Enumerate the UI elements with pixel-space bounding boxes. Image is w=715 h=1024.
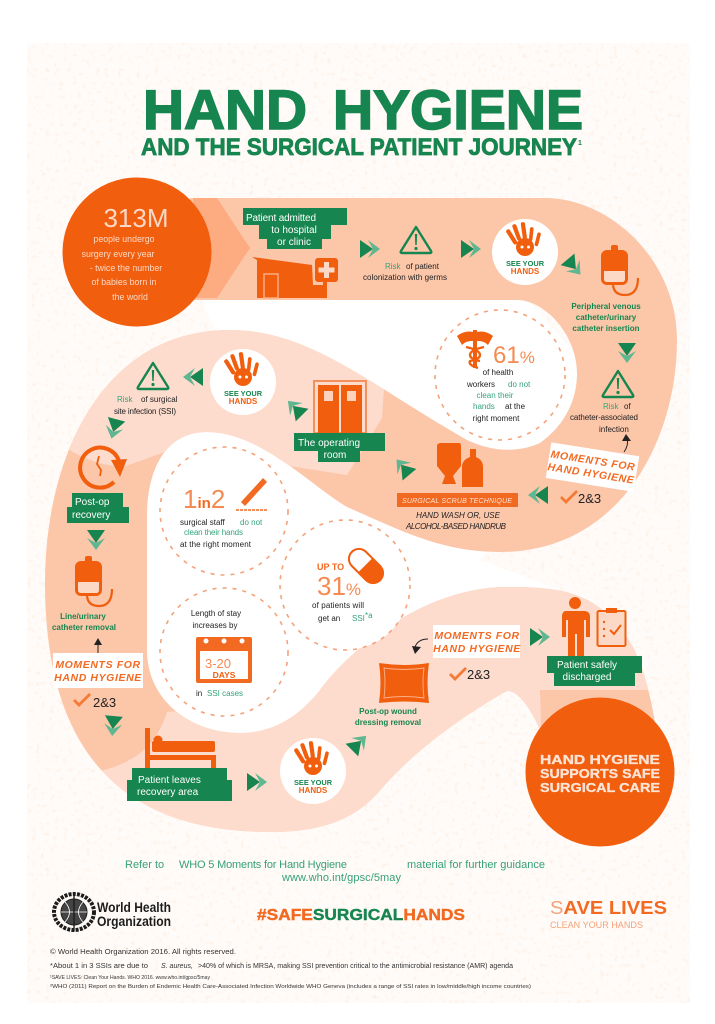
icon: pill — [343, 543, 389, 589]
text: refer to 5 moments: www.who.int/gpsc/5may — [281, 872, 402, 884]
label: patient admitted: to hospital — [271, 225, 317, 236]
arrow — [103, 715, 123, 737]
arrow: black curved pointer — [412, 639, 428, 654]
icon: see your hands 3: SEE YOUR — [294, 778, 333, 787]
icon: see your hands 1: HANDS — [511, 267, 540, 276]
wordmark: World Health — [97, 900, 171, 915]
check: moments 2 and 3: 2&3 — [467, 667, 490, 682]
callout: moments for hand hygiene 2: HAND HYGIENE — [54, 672, 142, 684]
text: risk of catheter infection — [570, 402, 638, 434]
check: moments 2 and 3: 2&3 — [93, 695, 116, 710]
label: patient leaves recovery area: recovery area — [137, 787, 199, 798]
chevron behind 313M circle — [193, 198, 250, 298]
text: risk of catheter infection: catheter-associated — [570, 413, 638, 422]
arrow: black curved pointer — [622, 434, 631, 452]
panel: 31 percent — [280, 520, 410, 650]
text: risk of colonization: colonization with germs — [363, 273, 447, 282]
statistic 1 in 2: 1in2 — [183, 484, 225, 514]
text: refer to 5 moments: WHO 5 Moments for Hand Hygiene — [179, 859, 347, 871]
icon: see your hands 1 — [492, 219, 558, 285]
text: in SSI cases: SSI cases — [207, 689, 243, 698]
text: risk of SSI: of surgical — [141, 395, 178, 404]
text: risk of SSI — [114, 395, 178, 416]
text: health workers: right moment — [473, 414, 520, 423]
text: risk of catheter infection: Risk — [603, 402, 620, 411]
callout: moments for hand hygiene 1: MOMENTS FOR — [550, 448, 636, 474]
footnotes: ²WHO (2011) Report on the Burden of Endemic Health Care-Associated Infection Worldwide WHO Geneva (includes a range of SSI rates in low/middle/high income countries) — [50, 984, 531, 990]
text: surgical staff: at the right moment — [180, 540, 252, 549]
label: post-op recovery: recovery — [72, 510, 110, 521]
footnotes: *About 1 in 3 SSIs are due to — [50, 963, 148, 970]
arrow — [103, 417, 125, 441]
icon: calendar 3-20 days: DAYS — [213, 670, 236, 680]
icon: warning, colonization — [401, 227, 431, 253]
text: risk of SSI: Risk — [117, 395, 134, 404]
circle: hand hygiene supports safe surgical care — [526, 698, 674, 846]
arrow — [282, 395, 308, 421]
check: moments 2 and 3 — [561, 491, 601, 506]
text: length of stay — [191, 609, 241, 630]
icon: warning, catheter infection — [603, 371, 633, 397]
statistic description: surgery every year — [82, 249, 154, 259]
text: peripheral catheter insertion: Peripheral venous — [571, 302, 641, 311]
icon: see your hands 2 — [210, 349, 276, 415]
statistic description: - twice the number — [90, 263, 162, 273]
text: surgical staff — [180, 518, 263, 549]
title line 2: AND THE SURGICAL PATIENT JOURNEY — [141, 134, 577, 160]
icon: see your hands 2: SEE YOUR — [224, 389, 263, 398]
label: patient admitted: or clinic — [277, 237, 311, 248]
text: peripheral catheter insertion — [571, 302, 641, 333]
statistic description: the world — [112, 292, 148, 302]
check: moments 2 and 3: 2&3 — [578, 491, 601, 506]
footnotes: >40% of which is MRSA, making SSI prevention critical to the antimicrobial resistance (AMR) agenda — [198, 963, 513, 970]
statistic description: of babies born in — [91, 277, 157, 287]
arrow: black up pointer — [94, 638, 102, 653]
text: patients will get an SSI: of patients will — [312, 601, 364, 610]
text: health workers: at the — [505, 402, 526, 411]
text: patients will get an SSI: get an — [318, 614, 340, 623]
arrow — [530, 628, 550, 646]
text: length of stay: increases by — [193, 621, 237, 630]
icon: recovery clock — [80, 448, 127, 488]
text: peripheral catheter insertion: catheter insertion — [572, 324, 640, 333]
check: moments 2 and 3 — [450, 667, 490, 682]
callout: moments for hand hygiene 3: MOMENTS FOR — [434, 630, 520, 642]
arrow — [461, 240, 481, 258]
label: the operating room: room — [324, 450, 346, 461]
text: refer to 5 moments — [125, 859, 545, 884]
title footnote mark: 1 — [578, 140, 582, 147]
arrow — [183, 368, 203, 386]
label: patient safely discharged — [547, 656, 642, 686]
icon: discharged person — [562, 597, 590, 656]
icon: clinic — [252, 257, 338, 298]
arrow — [247, 773, 267, 791]
text: length of stay: Length of stay — [191, 609, 241, 618]
logo: save lives: CLEAN YOUR HANDS — [550, 920, 643, 931]
statistic up to 31 percent: 31% — [317, 571, 361, 601]
text: risk of catheter infection: of — [624, 402, 631, 411]
logo: save lives — [550, 898, 667, 931]
label: patient leaves recovery area — [127, 768, 232, 801]
icon: caduceus — [457, 330, 493, 368]
callout: moments for hand hygiene 2 — [53, 653, 143, 688]
footnotes — [50, 947, 531, 990]
label: surgical scrub technique — [397, 493, 518, 507]
footnotes: © World Health Organization 2016. All rights reserved. — [50, 947, 236, 956]
text: post-op wound dressing removal: dressing removal — [355, 718, 421, 727]
text: line catheter removal: Line/urinary — [60, 612, 106, 621]
text: health workers: do not — [508, 380, 531, 389]
label: patient leaves recovery area: Patient leaves — [138, 775, 201, 786]
panel: 1 in 2 — [160, 447, 288, 575]
callout: moments for hand hygiene 2: MOMENTS FOR — [55, 659, 141, 671]
footnotes: ¹SAVE LIVES: Clean Your Hands. WHO 2016. www.who.int/gpsc/5may — [50, 975, 210, 981]
icon: blood bag 1 — [601, 245, 638, 295]
text: risk of colonization — [363, 262, 447, 282]
white inner areas of the path — [140, 298, 590, 745]
icon: operating room doors — [314, 381, 366, 433]
logo: World Health Organization — [54, 893, 171, 931]
emblem — [54, 893, 94, 931]
label: post-op recovery — [67, 493, 129, 523]
text: post-op wound dressing removal — [355, 707, 421, 727]
arrow — [528, 486, 548, 504]
icon: calendar 3-20 days: 3-20 — [205, 656, 231, 671]
check: moments 2 and 3 — [74, 694, 116, 710]
icon: see your hands 2: HANDS — [229, 397, 258, 406]
text: hand wash or use handrub: ALCOHOL-BASED HANDRUB — [405, 522, 507, 531]
text: refer to 5 moments: Refer to — [125, 859, 164, 871]
statistic 313M: 313M — [103, 203, 169, 233]
text: risk of catheter infection: infection — [599, 425, 629, 434]
hashtag: #SAFE SURGICAL HANDS — [257, 907, 465, 924]
icon: scrub bottles — [437, 443, 483, 487]
text: health workers: of health — [483, 368, 513, 377]
wordmark: Organization — [97, 914, 171, 929]
circle: hand hygiene supports safe surgical care: HAND HYGIENE — [540, 753, 660, 767]
text: surgical staff: surgical staff — [180, 518, 226, 527]
callout: moments for hand hygiene 1: HAND HYGIENE — [547, 461, 636, 487]
statistic up to 31 percent: UP TO — [317, 562, 344, 572]
panel: 61 percent — [435, 310, 565, 440]
arrow — [360, 240, 380, 258]
label: the operating room — [294, 433, 385, 462]
text: health workers: workers — [466, 380, 495, 389]
statistic 61 percent: 61% — [493, 342, 535, 369]
text: health workers: hands — [473, 402, 495, 411]
icon: calendar 3-20 days — [196, 637, 252, 683]
icon: bed — [145, 728, 216, 768]
icon: clipboard — [598, 608, 626, 646]
circle: 313M — [62, 178, 212, 326]
arrow — [346, 730, 372, 756]
arrow — [561, 254, 587, 280]
title word HAND: HAND — [143, 78, 307, 141]
circle: hand hygiene supports safe surgical care: SURGICAL CARE — [540, 781, 660, 795]
text: in SSI cases: in — [196, 689, 202, 698]
statistic description — [82, 234, 162, 302]
text: peripheral catheter insertion: catheter/urinary — [576, 313, 637, 322]
icon: see your hands 3: HANDS — [299, 786, 328, 795]
callout: moments for hand hygiene 3 — [433, 625, 521, 658]
text: patients will get an SSI — [312, 601, 373, 623]
label: patient admitted: Patient admitted — [246, 213, 316, 224]
label: post-op recovery: Post-op — [75, 497, 110, 508]
patient journey ribbon — [40, 198, 700, 850]
panel: length of stay — [160, 588, 288, 716]
label: patient safely discharged: Patient safely — [557, 660, 617, 671]
icon: blood bag 2 — [75, 556, 112, 606]
text: surgical staff: do not — [240, 518, 263, 527]
text: patients will get an SSI: SSI — [352, 614, 365, 623]
footnotes: S. aureus, — [161, 963, 193, 970]
label: patient safely discharged: discharged — [563, 672, 611, 683]
logo: save lives: SAVE LIVES — [550, 898, 667, 918]
text: health workers — [466, 368, 531, 423]
label: patient admitted — [243, 208, 347, 249]
label: the operating room: The operating — [298, 438, 360, 449]
text: post-op wound dressing removal: Post-op wound — [359, 707, 417, 716]
text: line catheter removal — [52, 612, 116, 632]
circle: hand hygiene supports safe surgical care: SUPPORTS SAFE — [540, 767, 660, 781]
label: surgical scrub technique: SURGICAL SCRUB TECHNIQUE — [402, 498, 512, 505]
text: refer to 5 moments: material for further guidance — [407, 859, 545, 871]
text: hand wash or use handrub — [405, 511, 507, 531]
arrow — [618, 343, 636, 363]
text: risk of colonization: of patient — [406, 262, 440, 271]
statistic description: people undergo — [93, 234, 155, 244]
title word HYGIENE: HYGIENE — [333, 78, 583, 141]
wordmark — [97, 900, 171, 929]
callout: moments for hand hygiene 1 — [546, 442, 639, 492]
text: risk of SSI: site infection (SSI) — [114, 407, 176, 416]
icon: pen — [236, 478, 267, 510]
icon: see your hands 1: SEE YOUR — [506, 259, 545, 268]
text: patients will get an SSI: *a — [365, 611, 373, 620]
arrow — [390, 454, 416, 480]
callout: moments for hand hygiene 3: HAND HYGIENE — [433, 643, 521, 655]
icon: see your hands 3 — [280, 738, 346, 804]
icon: warning, SSI — [138, 363, 168, 389]
icon: wound dressing — [379, 663, 429, 703]
arrow — [87, 530, 105, 550]
title — [141, 78, 583, 160]
text: surgical staff: clean their hands — [184, 528, 243, 537]
text: risk of colonization: Risk — [385, 262, 402, 271]
text: line catheter removal: catheter removal — [52, 623, 116, 632]
text: health workers: clean their — [477, 391, 514, 400]
text: hand wash or use handrub: HAND WASH OR, USE — [416, 511, 501, 520]
